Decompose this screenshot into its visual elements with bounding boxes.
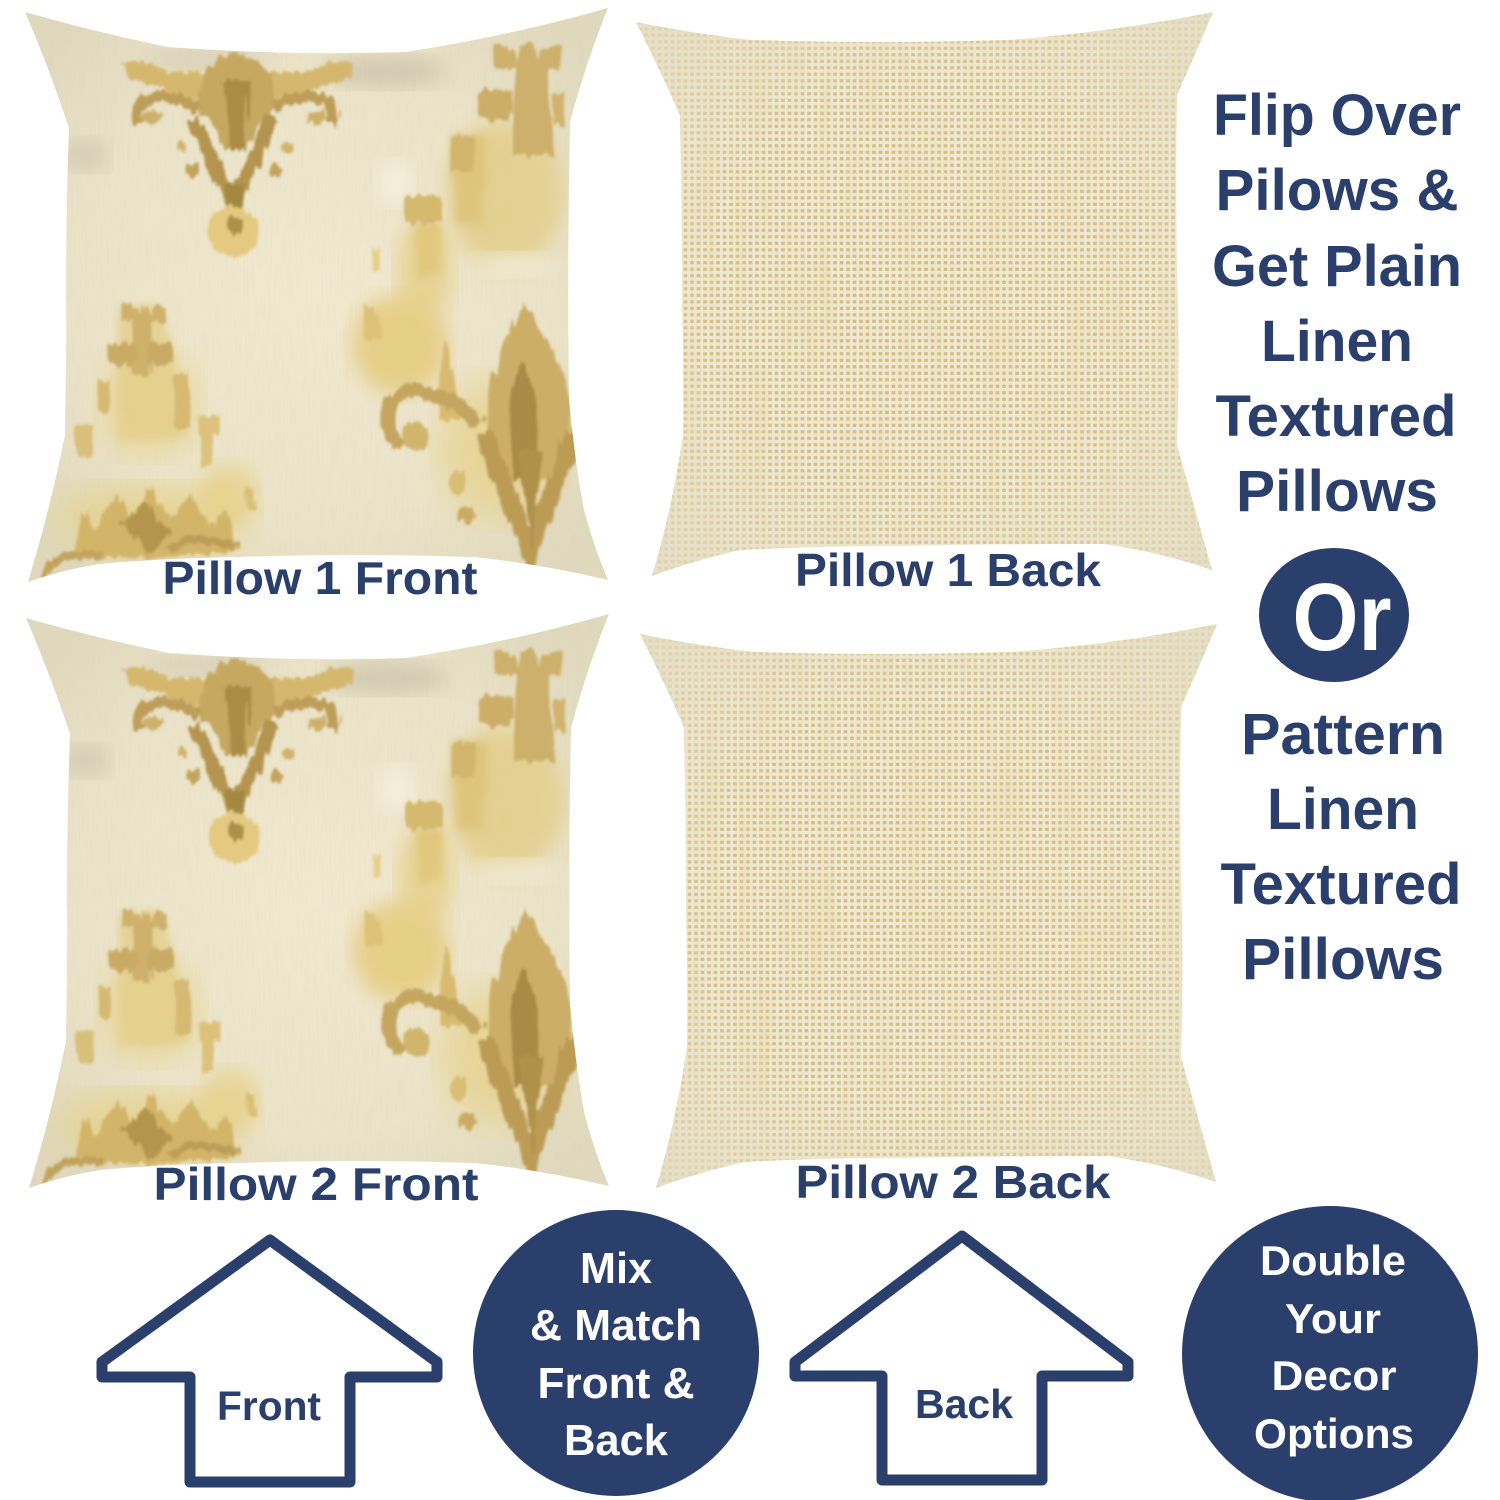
label: pillow 1 front: Pillow 1 Front bbox=[162, 552, 478, 604]
text block: pattern linen: Pillows bbox=[1242, 927, 1444, 992]
text block: pattern linen: Textured bbox=[1220, 852, 1462, 917]
circle: double your decor: Double bbox=[1260, 1237, 1406, 1284]
pillow 1 front bbox=[20, 0, 615, 590]
circle: double your decor: Decor bbox=[1272, 1352, 1396, 1399]
text block: pattern linen: Pattern bbox=[1241, 702, 1445, 767]
circle: mix and match: Front & bbox=[538, 1359, 694, 1408]
pillow 2 back bbox=[634, 617, 1224, 1192]
circle: double your decor: Options bbox=[1254, 1410, 1414, 1457]
text block: flip over plain: Pillows bbox=[1236, 459, 1438, 524]
text block: flip over plain: Flip Over bbox=[1213, 83, 1461, 148]
text block: flip over plain: Pilows & bbox=[1216, 158, 1458, 223]
arrow: back: Back bbox=[915, 1381, 1013, 1427]
circle: double your decor bbox=[1182, 1206, 1478, 1500]
circle: mix and match: Back bbox=[564, 1416, 669, 1465]
label: pillow 2 back: Pillow 2 Back bbox=[796, 1156, 1111, 1208]
pillow 2 front bbox=[21, 606, 616, 1196]
label: pillow 2 front: Pillow 2 Front bbox=[154, 1158, 478, 1210]
pillow 1 back bbox=[630, 5, 1220, 580]
circle: mix and match: & Match bbox=[530, 1301, 702, 1350]
circle: mix and match: Mix bbox=[580, 1244, 653, 1293]
text block: flip over plain bbox=[1212, 83, 1462, 524]
text block: pattern linen: Linen bbox=[1267, 777, 1419, 842]
text block: flip over plain: Textured bbox=[1216, 384, 1456, 449]
arrow: front: Front bbox=[217, 1383, 321, 1429]
label: pillow 1 back: Pillow 1 Back bbox=[795, 544, 1101, 596]
circle: mix and match bbox=[473, 1210, 759, 1496]
arrow: front bbox=[102, 1240, 437, 1482]
arrow: back bbox=[795, 1236, 1128, 1480]
badge: or: Or bbox=[1292, 564, 1392, 671]
text block: pattern linen bbox=[1220, 702, 1462, 992]
circle: double your decor: Your bbox=[1285, 1295, 1381, 1342]
text block: flip over plain: Linen bbox=[1261, 309, 1413, 374]
text block: flip over plain: Get Plain bbox=[1212, 234, 1462, 299]
badge: or bbox=[1259, 548, 1409, 682]
